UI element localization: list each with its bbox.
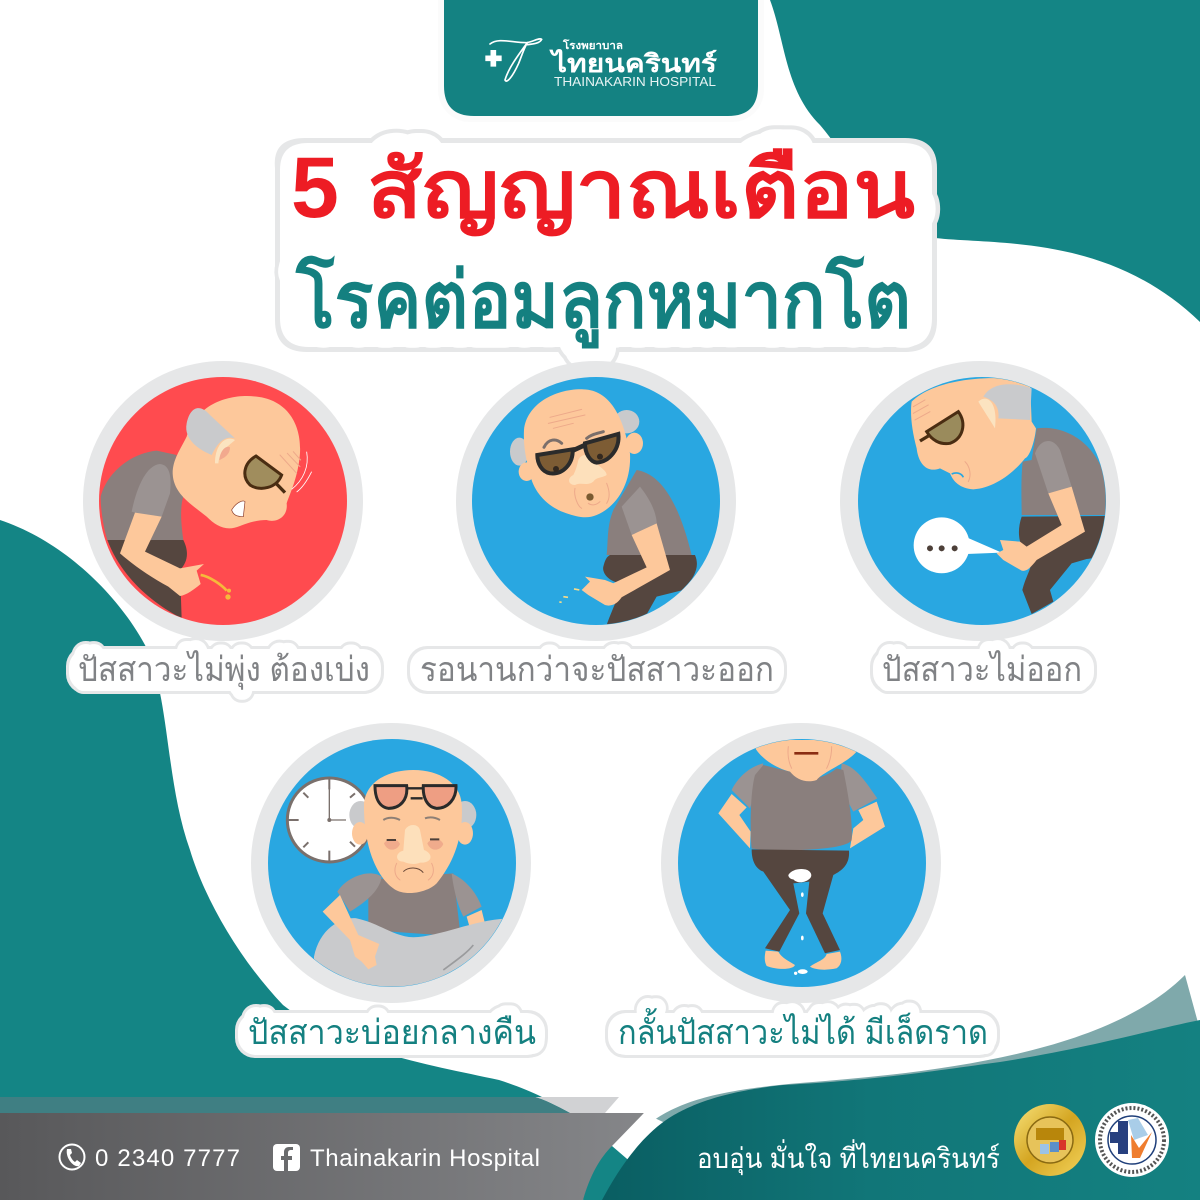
wave: main teal [602, 1020, 1200, 1200]
wave: teal edge [583, 1146, 640, 1200]
footer left band [0, 1097, 644, 1200]
logo text thai small: โรงพยาบาล [562, 39, 623, 52]
label white block [410, 649, 784, 691]
title outline line 2: โรคต่อมลูกหมากโต [295, 254, 911, 349]
label white: กลั้นปัสสาวะไม่ได้ มีเล็ดราด [618, 1008, 988, 1052]
logo text thai large: ไทยนครินทร์ [548, 48, 718, 78]
slogan: อบอุ่น มั่นใจ ที่ไทยนครินทร์ [697, 1139, 1000, 1176]
title number 5: 5 [291, 140, 339, 236]
label white: รอนานกว่าจะปัสสาวะออก [420, 651, 774, 689]
header logo tab [438, 0, 764, 122]
label: ปัสสาวะบ่อยกลางคืน [248, 1014, 536, 1052]
title white bubble line 1: สัญญาณเตือน [367, 145, 915, 236]
label outline: ปัสสาวะไม่ออก [882, 650, 1082, 689]
label: กลั้นปัสสาวะไม่ได้ มีเล็ดราด [618, 1008, 988, 1052]
label outline: รอนานกว่าจะปัสสาวะออก [420, 651, 774, 689]
label white: ปัสสาวะบ่อยกลางคืน [248, 1014, 536, 1052]
panel: incontinence [605, 723, 1000, 1058]
label outline block [235, 1010, 548, 1058]
wave: pale strip [647, 975, 1200, 1140]
illustration: man looking down with speech bubble [911, 378, 1108, 614]
label outline block [407, 646, 787, 694]
icon: phone [60, 1144, 84, 1170]
label outline block [870, 646, 1097, 694]
badge: hospital accreditation [1095, 1103, 1169, 1177]
title white block [280, 143, 932, 347]
label white: ปัสสาวะไม่ออก [882, 650, 1082, 689]
icon: facebook [273, 1144, 300, 1171]
logo mark [485, 39, 542, 81]
label outline block [66, 646, 384, 694]
background: lower left teal shape [0, 520, 570, 1113]
background: top right teal shape [770, 0, 1200, 322]
label white block [873, 649, 1094, 691]
title line 2: teal: โรคต่อมลูกหมากโต [295, 254, 911, 349]
badge: gold medal [1014, 1104, 1086, 1176]
label white block [69, 649, 381, 691]
panel: frequent night urination [235, 723, 548, 1058]
illustration: man holding leak [718, 740, 885, 975]
label outline: ปัสสาวะไม่พุ่ง ต้องเบ่ง [78, 650, 370, 690]
title line 1: red: สัญญาณเตือน [367, 145, 915, 236]
label white: ปัสสาวะไม่พุ่ง ต้องเบ่ง [78, 650, 370, 690]
title outline block [275, 138, 937, 352]
label outline: กลั้นปัสสาวะไม่ได้ มีเล็ดราด [618, 1008, 988, 1052]
title outline line 1: สัญญาณเตือน [367, 145, 915, 236]
label outline: ปัสสาวะบ่อยกลางคืน [248, 1014, 536, 1052]
title white bubble line 2: โรคต่อมลูกหมากโต [295, 254, 911, 349]
label outline block [605, 1010, 1000, 1058]
footer right wave [583, 975, 1200, 1200]
panel: weak stream [66, 361, 384, 694]
label: ปัสสาวะไม่พุ่ง ต้องเบ่ง [78, 650, 370, 690]
logo text english: THAINAKARIN HOSPITAL [554, 75, 716, 89]
illustration: man waiting, squinting [510, 389, 697, 625]
phone number: 0 2340 7777 [95, 1145, 240, 1172]
illustration: man bending, weak stream [101, 396, 312, 618]
label: ปัสสาวะไม่ออก [882, 650, 1082, 689]
facebook name: Thainakarin Hospital [310, 1145, 540, 1172]
illustration: tired man with clock and blanket [287, 770, 507, 997]
title [275, 138, 937, 352]
label: รอนานกว่าจะปัสสาวะออก [420, 651, 774, 689]
wave: white slash [583, 1113, 680, 1200]
panel: cannot urinate [840, 361, 1120, 694]
panel: delayed start [407, 361, 787, 694]
label white block [238, 1013, 545, 1055]
label white block [608, 1013, 997, 1055]
